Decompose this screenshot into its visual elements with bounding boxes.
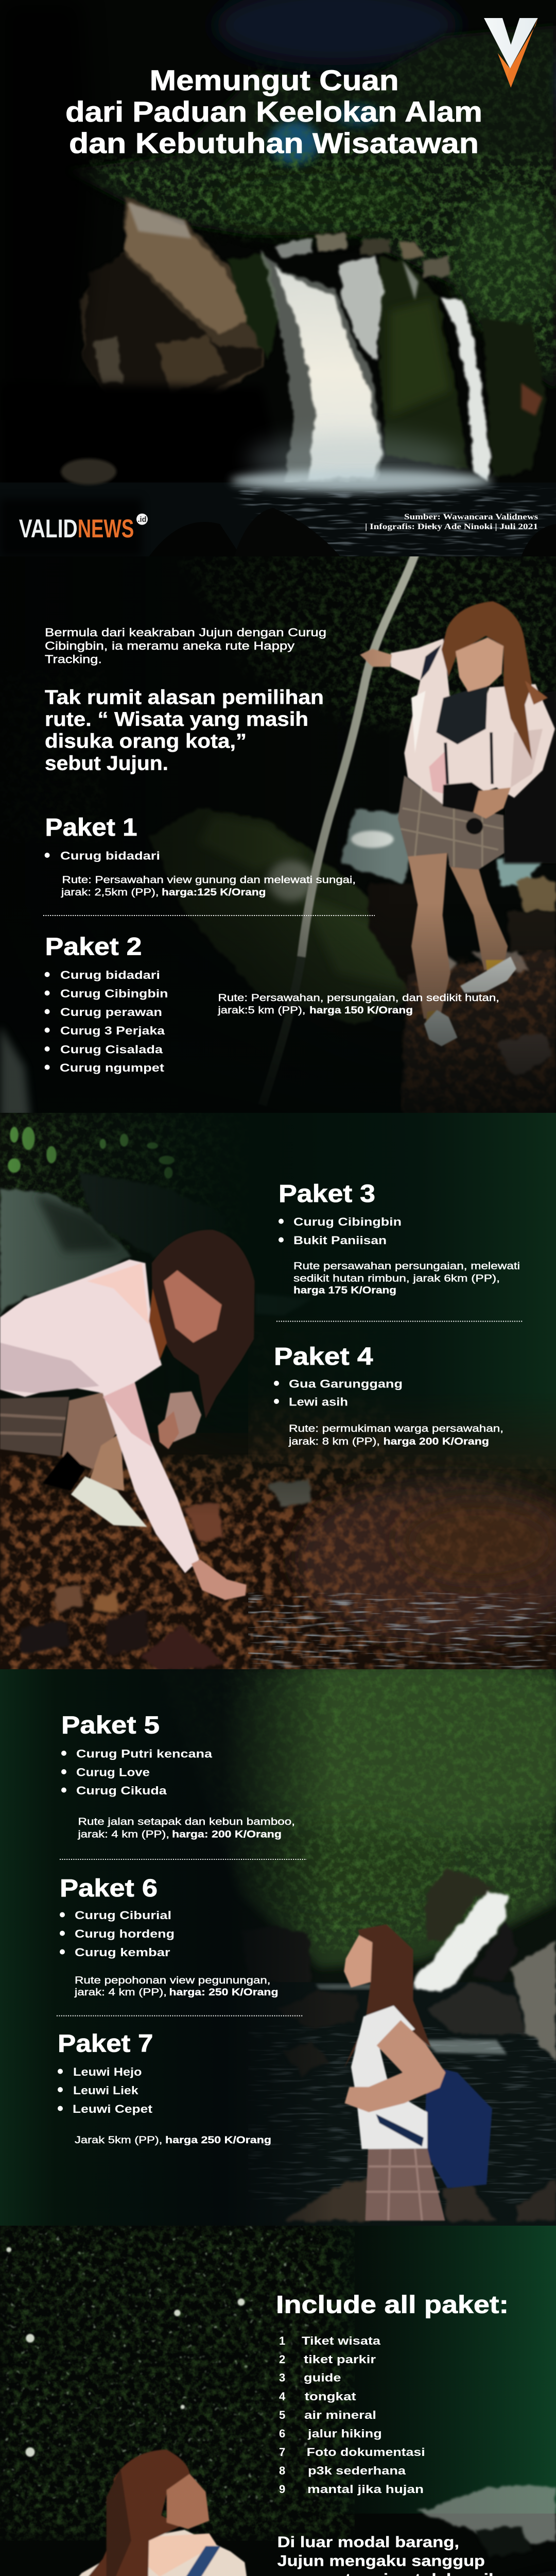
figure <box>0 2450 263 2576</box>
moss boulder <box>149 808 422 1026</box>
list: included items: tongkat <box>305 2390 356 2403</box>
text: intro: Cibingbin, ia meramu aneka rute Happy <box>45 639 294 652</box>
block: paket 3: Curug Cibingbin <box>293 1215 402 1228</box>
figure <box>360 601 555 1046</box>
text: quote: disuka orang kota,” <box>45 731 247 753</box>
list: included items: Foto dokumentasi <box>307 2446 425 2459</box>
block: paket 3: Rute persawahan persungaian, melewati <box>293 1261 520 1272</box>
boulders <box>61 459 116 485</box>
block: paket 1: Paket 1 <box>45 814 137 841</box>
block: paket 5: Rute jalan setapak dan kebun bamboo, <box>78 1817 295 1827</box>
block: paket 7: harga 250 K/Orang <box>165 2135 271 2146</box>
block: include all paket heading: Include all paket: <box>276 2291 509 2318</box>
photo: waterfall in jungle <box>0 0 556 556</box>
block: paket 4: Lewi asih <box>289 1396 348 1409</box>
list: included items: 5 <box>279 2409 285 2421</box>
list: included items: 7 <box>279 2446 285 2459</box>
panel: intro with paket 1 and 2 <box>0 556 556 2484</box>
source credit: Sumber: Wawancara Validnews <box>404 513 538 521</box>
list: included items: 9 <box>279 2483 285 2496</box>
block: paket 2: Rute: Persawahan, persungaian, dan sedikit hutan, <box>218 993 499 1004</box>
block: paket 2: Curug bidadari <box>60 969 160 981</box>
list: included items <box>279 2334 425 2496</box>
logo: Validnews.id: .id <box>138 515 146 524</box>
icon: Validnews V logo <box>484 18 538 88</box>
text: intro: Bermula dari keakraban Jujun dengan Curug <box>45 626 326 639</box>
rocks <box>426 1868 496 1942</box>
list: included items: tiket parkir <box>304 2353 376 2366</box>
block: paket 7: Jarak 5km (PP), <box>75 2135 162 2146</box>
block: paket 3: Bukit Paniisan <box>293 1234 387 1247</box>
block: paket 2: Curug ngumpet <box>60 1061 165 1074</box>
block: paket 4: Gua Garunggang <box>289 1378 403 1391</box>
boulders <box>427 1982 528 2035</box>
block: paket 1: jarak: 2,5km (PP), <box>61 887 159 898</box>
top boulders <box>315 231 349 251</box>
list: included items: 4 <box>279 2390 286 2403</box>
text: intro <box>45 626 326 666</box>
block: paket 5: Paket 5 <box>61 1712 160 1739</box>
panel: include all paket <box>0 2226 556 2576</box>
block: paket 6: harga: 250 K/Orang <box>169 1987 278 1998</box>
figure <box>344 1924 492 2221</box>
block: paket 3: Paket 3 <box>279 1180 375 1208</box>
list: included items: 6 <box>279 2427 285 2440</box>
block: paket 2: Paket 2 <box>45 934 142 960</box>
block: paket 7: Leuwi Liek <box>73 2084 138 2097</box>
text: quote <box>45 687 324 775</box>
list: included items: air mineral <box>304 2409 376 2421</box>
list: included items: 2 <box>279 2353 285 2366</box>
block: paket 4: harga 200 K/Orang <box>383 1436 489 1447</box>
block: paket 2: Curug 3 Perjaka <box>60 1024 165 1037</box>
shading <box>0 553 556 1118</box>
block: paket 6: Curug hordeng <box>75 1927 175 1940</box>
text: quote: sebut Jujun. <box>45 752 168 775</box>
title: dan Kebutuhan Wisatawan <box>69 127 479 159</box>
block: paket 4 <box>274 1343 503 1447</box>
cliff <box>80 197 264 396</box>
block: paket 5: Curug Love <box>76 1766 150 1778</box>
list: included items: 1 <box>279 2334 285 2347</box>
list: included items: Tiket wisata <box>302 2334 381 2347</box>
block: paket 3 <box>279 1180 520 1296</box>
block: paket 1: Curug bidadari <box>60 850 160 862</box>
waterfall <box>413 1891 507 1991</box>
block: paket 6: Curug Ciburial <box>75 1909 171 1922</box>
block: paket 2: Curug Cibingbin <box>60 987 168 1000</box>
list: included items: 8 <box>279 2464 285 2477</box>
photo: woman with backpack in the forest <box>0 2215 556 2576</box>
source credit: | Infografis: Dieky Ade Ninoki | Juli 2021 <box>365 522 538 531</box>
block: paket 3: harga 175 K/Orang <box>293 1285 396 1296</box>
block: paket 4: jarak: 8 km (PP), <box>288 1436 380 1447</box>
list: included items: p3k sederhana <box>308 2464 406 2477</box>
falls <box>260 249 385 483</box>
text: closing paragraph <box>277 2534 499 2576</box>
block: paket 2: jarak:5 km (PP), <box>217 1005 306 1016</box>
block: paket 6: jarak: 4 km (PP), <box>74 1987 167 1998</box>
photo: woman looking at a waterfall <box>0 1653 556 2231</box>
riverbed <box>0 1433 556 1674</box>
source credit <box>365 513 538 531</box>
block: paket 6: Paket 6 <box>60 1875 158 1902</box>
panel: hero waterfall <box>0 0 556 556</box>
rope <box>263 553 415 1105</box>
block: paket 5: jarak: 4 km (PP), <box>77 1829 169 1840</box>
panel: paket 3 and 4 <box>0 1113 556 1669</box>
mossy rock <box>379 257 468 470</box>
block: paket 1: Rute: Persawahan view gunung dan melewati sungai, <box>62 875 356 886</box>
block: paket 2: harga 150 K/Orang <box>309 1005 413 1016</box>
block: paket 7: Paket 7 <box>58 2030 153 2058</box>
block: paket 5 <box>61 1712 295 1840</box>
river <box>0 1982 556 2231</box>
photo: woman crossing a stream holding a rope <box>0 553 556 1118</box>
block: paket 2: Curug perawan <box>60 1006 162 1019</box>
block: paket 4: Paket 4 <box>274 1343 373 1370</box>
text: intro: Tracking. <box>45 653 102 666</box>
figure <box>0 1230 255 1600</box>
block: paket 5: Curug Putri kencana <box>76 1748 213 1760</box>
list: included items: 3 <box>279 2371 285 2384</box>
block: paket 5: Curug Cikuda <box>76 1784 167 1797</box>
list: included items: guide <box>304 2371 341 2384</box>
block: paket 2: Curug Cisalada <box>60 1043 163 1056</box>
block: paket 4: Rute: permukiman warga persawahan, <box>289 1423 503 1434</box>
block: paket 7: Leuwi Hejo <box>73 2065 142 2078</box>
title: Memungut Cuan <box>150 64 399 96</box>
title: dari Paduan Keelokan Alam <box>65 95 482 128</box>
block: paket 7 <box>58 2030 271 2146</box>
block: paket 7: Leuwi Cepet <box>73 2103 153 2115</box>
text: closing paragraph: Di luar modal barang, <box>277 2534 459 2551</box>
overlay <box>14 1113 556 1506</box>
block: paket 1 <box>45 814 356 898</box>
list: included items: jalur hiking <box>307 2427 382 2440</box>
logo: Validnews.id <box>19 514 148 543</box>
pool <box>0 483 556 556</box>
logo: Validnews.id: NEWS <box>78 514 134 543</box>
lower shade <box>0 383 284 488</box>
block: paket 6 <box>60 1875 278 1998</box>
photo: woman touching stream water <box>0 1108 556 1674</box>
list: included items: mantal jika hujan <box>307 2483 424 2496</box>
logo: Validnews.id: VALID <box>19 514 78 543</box>
title <box>65 64 482 159</box>
text: closing paragraph: Jujun mengaku sanggup <box>277 2552 485 2570</box>
block: paket 1: harga:125 K/Orang <box>162 887 266 898</box>
panel: paket 5, 6 and 7 <box>0 1669 556 2226</box>
block: paket 3: sedikit hutan rimbun, jarak 6km (PP), <box>293 1273 500 1284</box>
overlay <box>0 1664 556 2231</box>
block: paket 6: Curug kembar <box>75 1946 170 1959</box>
block: paket 6: Rute pepohonan view pegunungan, <box>75 1975 271 1986</box>
text: quote: rute. “ Wisata yang masih <box>45 708 308 731</box>
block: paket 2 <box>45 934 499 1074</box>
text: quote: Tak rumit alasan pemilihan <box>45 687 324 709</box>
block: paket 5: harga: 200 K/Orang <box>172 1829 282 1840</box>
stones <box>369 884 426 1015</box>
